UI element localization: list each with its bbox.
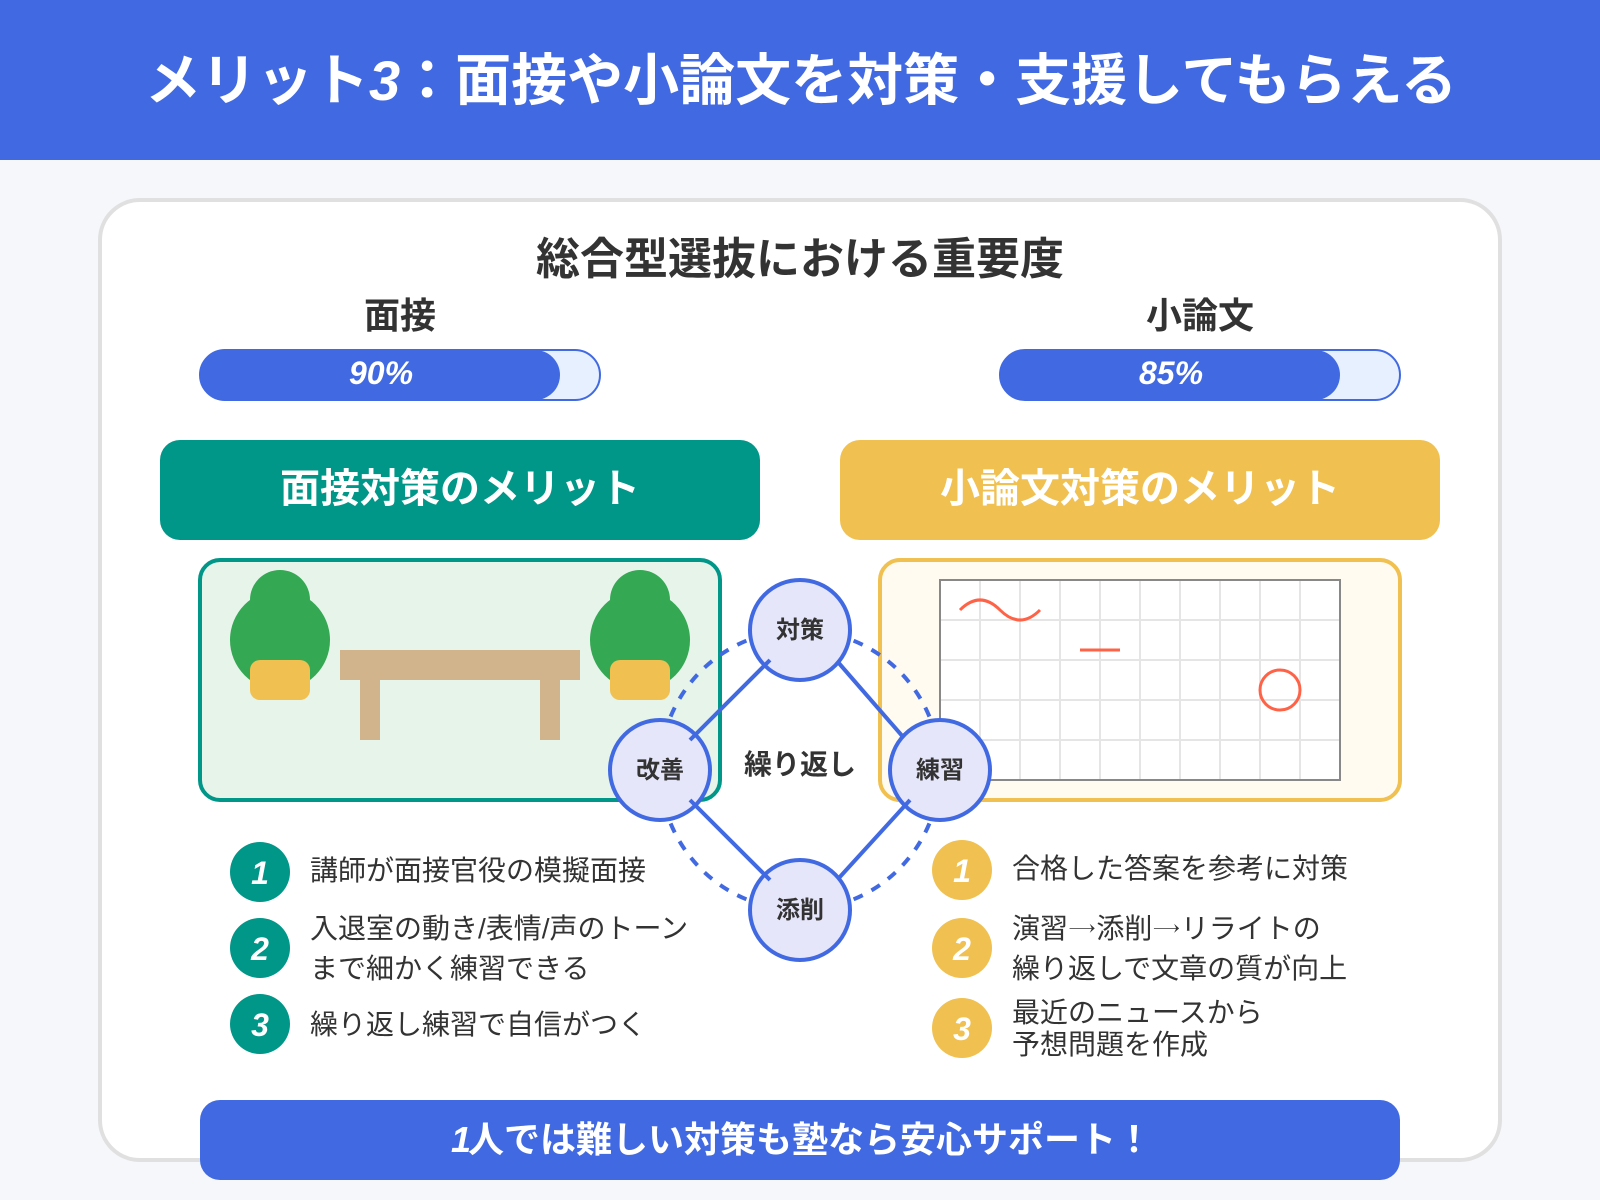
item 1: 1 bbox=[953, 853, 971, 889]
panel: main card bbox=[100, 200, 1500, 1160]
heading: interview merits bbox=[160, 440, 760, 540]
node: 改善: 改善 bbox=[636, 757, 684, 784]
node: 練習: 練習 bbox=[916, 757, 964, 784]
icon: manuscript grid bbox=[940, 580, 1340, 780]
list: interview merits bbox=[230, 842, 688, 1054]
item 2 bbox=[230, 913, 688, 984]
item 2: 演習→添削→リライトの bbox=[1012, 913, 1321, 944]
heading: importance: 総合型選抜における重要度 bbox=[536, 235, 1064, 284]
callout: footer banner: 人では難しい対策も塾なら安心サポート！ bbox=[468, 1119, 1152, 1160]
item 3: 予想問題を作成 bbox=[1012, 1029, 1208, 1060]
item 3: 最近のニュースから bbox=[1012, 997, 1263, 1028]
bar chart: interview importance bbox=[200, 295, 600, 400]
item 2: 2 bbox=[952, 931, 971, 967]
title: メリット3：面接や小論文を対策・支援してもらえる bbox=[145, 49, 1457, 112]
item 2 bbox=[932, 913, 1347, 984]
item 3 bbox=[932, 997, 1263, 1060]
heading: essay merits: 小論文対策のメリット bbox=[940, 467, 1340, 511]
node: 練習 bbox=[890, 720, 990, 820]
bar chart: essay importance bbox=[1000, 295, 1400, 400]
node: 添削 bbox=[750, 860, 850, 960]
item 3 bbox=[230, 994, 646, 1054]
item 1: 講師が面接官役の模擬面接 bbox=[310, 855, 646, 886]
bar chart: interview importance: 90% bbox=[349, 355, 413, 391]
node: 対策 bbox=[750, 580, 850, 680]
icon: right plant bbox=[590, 570, 690, 700]
icon: red correction marks bbox=[960, 600, 1300, 710]
item 3: 繰り返し練習で自信がつく bbox=[310, 1009, 646, 1040]
item 1: 1 bbox=[251, 855, 269, 891]
header banner bbox=[0, 0, 1600, 160]
panel: interview room illustration bbox=[200, 560, 720, 800]
bar chart: essay importance: 小論文 bbox=[1146, 295, 1254, 336]
chart: repetition cycle bbox=[610, 580, 990, 960]
icon: left plant bbox=[230, 570, 330, 700]
heading: essay merits bbox=[840, 440, 1440, 540]
node: 添削: 添削 bbox=[776, 897, 824, 924]
node: 対策: 対策 bbox=[776, 617, 824, 644]
item 3: 3 bbox=[251, 1007, 269, 1043]
panel: essay sheet illustration bbox=[880, 560, 1400, 800]
item 2: まで細かく練習できる bbox=[310, 953, 589, 984]
item 3: 3 bbox=[953, 1011, 971, 1047]
bar chart: essay importance: 85% bbox=[1139, 355, 1203, 391]
node: 改善 bbox=[610, 720, 710, 820]
item 1 bbox=[230, 842, 646, 902]
heading: interview merits: 面接対策のメリット bbox=[280, 467, 640, 511]
item 2: 繰り返しで文章の質が向上 bbox=[1012, 953, 1347, 984]
callout: footer banner: 1 bbox=[451, 1119, 471, 1160]
arrows: cycle connectors bbox=[690, 660, 910, 880]
icon: table bbox=[340, 650, 580, 740]
item 1 bbox=[932, 840, 1348, 900]
item 2: 2 bbox=[250, 931, 269, 967]
label: repetition: 繰り返し bbox=[744, 749, 856, 780]
list: essay merits bbox=[932, 840, 1348, 1060]
callout: footer banner bbox=[200, 1100, 1400, 1180]
item 1: 合格した答案を参考に対策 bbox=[1012, 853, 1348, 884]
item 2: 入退室の動き/表情/声のトーン bbox=[310, 913, 688, 944]
bar chart: interview importance: 面接 bbox=[364, 295, 436, 336]
